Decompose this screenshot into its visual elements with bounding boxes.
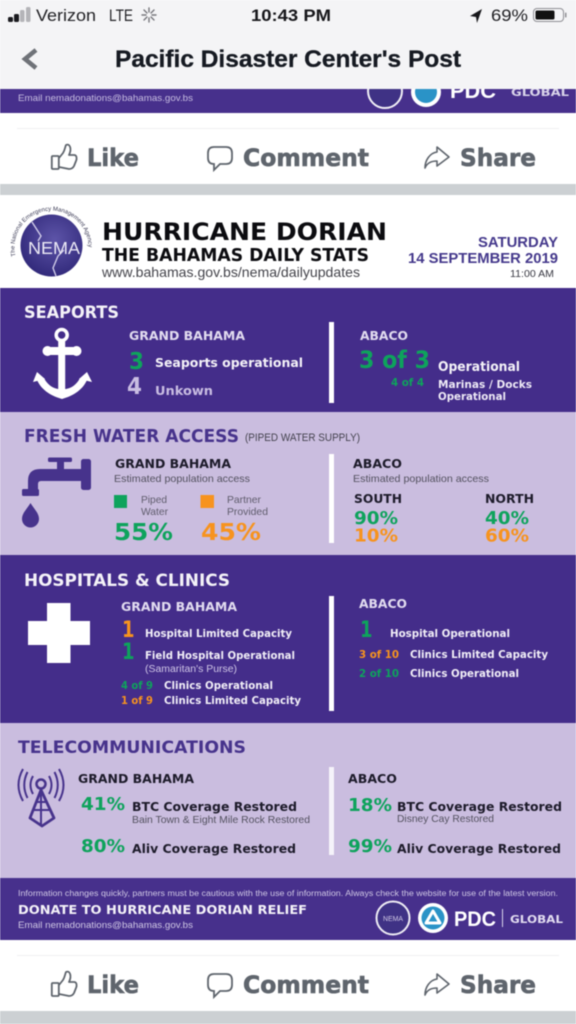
column: Abaco water: ABACO <box>353 456 402 471</box>
text: PDC wordmark: PDC <box>454 908 496 931</box>
text: Comment: Comment <box>243 144 369 172</box>
column: Abaco seaports: Operational <box>438 390 506 403</box>
legend: piped water: Piped <box>141 494 167 506</box>
column: Grand Bahama seaports: GRAND BAHAMA <box>129 328 245 343</box>
column: Abaco telecom: Disney Cay Restored <box>397 813 494 825</box>
column: Abaco hospitals: Clinics Operational <box>410 667 519 680</box>
text: network type: LTE <box>109 6 133 25</box>
column: Grand Bahama telecom: 41% <box>81 794 125 815</box>
icon: clipped PDC logo <box>411 77 441 107</box>
column: Grand Bahama hospitals: 4 of 9 <box>121 679 153 692</box>
panel: telecommunications <box>0 723 576 878</box>
column: Abaco water: NORTH <box>485 491 534 506</box>
column: Grand Bahama seaports <box>127 328 303 400</box>
column: Abaco hospitals: Clinics Limited Capacity <box>410 648 548 661</box>
divider <box>329 454 334 543</box>
column: Abaco water: 90% <box>354 508 398 529</box>
text: website: www.bahamas.gov.bs/nema/dailyupdates <box>101 264 360 280</box>
icon: NEMA logo small <box>376 902 410 934</box>
heading: seaports: SEAPORTS <box>24 303 119 323</box>
icon: NEMA logo <box>10 206 92 278</box>
icon: anchor <box>33 330 92 399</box>
column: Abaco water: SOUTH <box>354 491 402 506</box>
text: GLOBAL wordmark: GLOBAL <box>510 914 563 926</box>
text: clipped GLOBAL wordmark: GLOBAL <box>511 86 569 99</box>
panel: previous post footer strip <box>0 74 576 113</box>
icon: like thumb <box>52 972 77 996</box>
column: Abaco hospitals: 3 of 10 <box>359 648 399 661</box>
icon: clipped NEMA logo <box>368 74 402 108</box>
column: Grand Bahama telecom <box>78 771 310 857</box>
text: Share: Share <box>460 971 536 999</box>
column: Grand Bahama telecom: 80% <box>81 836 125 857</box>
column: Grand Bahama water <box>114 456 268 546</box>
divider <box>329 322 334 403</box>
text: clock: 10:43 PM <box>251 6 331 25</box>
panel: phone navigation bar <box>0 0 576 89</box>
column: Grand Bahama water: 55% <box>114 518 173 546</box>
text: battery percent: 69% <box>491 6 528 25</box>
icon: medical cross <box>28 603 90 663</box>
icon: signal bars <box>8 7 30 22</box>
heading: hospitals and clinics: HOSPITALS & CLINICS <box>24 571 230 591</box>
column: Grand Bahama seaports: 4 <box>127 374 142 400</box>
icon: location arrow <box>470 9 482 23</box>
column: Abaco telecom: Aliv Coverage Restored <box>397 841 561 856</box>
icon: share arrow <box>425 147 449 168</box>
column: Grand Bahama hospitals: 1 <box>122 618 134 643</box>
icon: NEMA logo: The National Emergency Management Agency <box>10 206 92 258</box>
column: Abaco telecom <box>348 771 562 857</box>
panel: infographic footer <box>0 878 576 940</box>
text: carrier: Verizon <box>36 6 96 25</box>
column: Grand Bahama hospitals: 1 <box>122 640 134 665</box>
column: Abaco seaports: 4 of 4 <box>391 377 424 389</box>
column: Grand Bahama seaports: Seaports operational <box>155 355 303 370</box>
column: Grand Bahama hospitals: Clinics Limited Capacity <box>164 694 301 707</box>
heading: Hurricane Dorian: HURRICANE DORIAN <box>102 218 387 246</box>
icon: NEMA logo small: NEMA <box>383 914 403 923</box>
column: Abaco seaports: ABACO <box>360 328 408 343</box>
text: Share: Share <box>460 144 536 172</box>
column: Grand Bahama water: Estimated population access <box>114 473 250 485</box>
panel: top action row <box>17 128 559 172</box>
column: Grand Bahama hospitals: GRAND BAHAMA <box>121 599 237 614</box>
column: Abaco seaports <box>359 328 532 403</box>
text: date: 14 SEPTEMBER 2019 <box>408 250 558 267</box>
column: Grand Bahama water: GRAND BAHAMA <box>115 456 231 471</box>
icon: share arrow <box>425 974 449 995</box>
column: Grand Bahama hospitals <box>121 599 301 707</box>
column: Grand Bahama telecom: BTC Coverage Restored <box>132 799 297 814</box>
column: Grand Bahama hospitals: (Samaritan's Purse) <box>145 664 237 675</box>
column: Grand Bahama telecom: Bain Town & Eight Mile Rock Restored <box>132 814 310 826</box>
legend: partner provided <box>200 494 268 518</box>
legend: partner provided: Partner <box>227 494 261 506</box>
column: Grand Bahama seaports: Unkown <box>155 383 213 398</box>
legend: partner provided: Provided <box>227 506 268 518</box>
panel: gray separator bottom <box>0 1011 576 1024</box>
panel: gray separator top <box>0 184 576 195</box>
column: Abaco hospitals: 1 <box>360 618 372 643</box>
icon: battery <box>534 8 566 22</box>
column: Grand Bahama telecom: GRAND BAHAMA <box>78 771 194 786</box>
text: weekday: SATURDAY <box>478 234 558 251</box>
legend: piped water <box>114 494 168 518</box>
legend: piped water: Water <box>141 506 168 518</box>
column: Grand Bahama seaports: 3 <box>129 349 144 375</box>
column: Grand Bahama hospitals: Field Hospital Operational <box>145 649 295 662</box>
text: Like: Like <box>87 971 139 999</box>
text: navigation title: Pacific Disaster Center's Post <box>115 46 461 73</box>
divider <box>329 767 334 855</box>
text: disclaimer: Information changes quickly, partners must be cautious with the use of information. Always check the website for use of the latest version. <box>18 889 558 898</box>
divider <box>329 596 334 711</box>
icon: PDC logo <box>418 903 448 933</box>
icon: NEMA logo: NEMA <box>28 238 80 258</box>
heading: fresh water access: FRESH WATER ACCESS <box>24 427 239 447</box>
column: Abaco hospitals: Hospital Operational <box>390 627 510 640</box>
icon: loading spinner <box>142 8 156 22</box>
panel: bottom action row <box>17 955 559 999</box>
text: clipped PDC wordmark: PDC <box>450 80 496 103</box>
column: Abaco water: Estimated population access <box>353 473 489 485</box>
column: Abaco seaports: Marinas / Docks <box>438 378 532 391</box>
heading: telecommunications: TELECOMMUNICATIONS <box>18 738 246 758</box>
column: Abaco telecom: 18% <box>348 795 392 816</box>
icon: like thumb <box>52 145 77 169</box>
icon: radio tower <box>18 769 64 826</box>
column: Abaco seaports: Operational <box>438 360 520 375</box>
column: Abaco telecom: BTC Coverage Restored <box>397 799 562 814</box>
column: Grand Bahama hospitals: 1 of 9 <box>121 694 153 707</box>
panel: hospitals and clinics <box>0 555 576 723</box>
column: Abaco hospitals <box>359 596 548 680</box>
column: Grand Bahama hospitals: Hospital Limited Capacity <box>145 627 292 640</box>
text: previous post email: Email nemadonations@bahamas.gov.bs <box>18 93 193 104</box>
column: Abaco telecom: ABACO <box>348 771 397 786</box>
column: Abaco water: 40% <box>485 508 529 529</box>
icon: comment bubble <box>208 974 232 997</box>
text: Like: Like <box>87 144 139 172</box>
column: Grand Bahama water: 45% <box>201 518 261 546</box>
column: Abaco water: 60% <box>485 526 529 546</box>
column: Abaco hospitals: ABACO <box>359 596 407 611</box>
heading: daily stats subtitle: THE BAHAMAS DAILY STATS <box>102 246 369 266</box>
column: Grand Bahama hospitals: Clinics Operational <box>164 679 273 692</box>
text: donation email: Email nemadonations@bahamas.gov.bs <box>18 920 193 931</box>
text: donate heading: DONATE TO HURRICANE DORIAN RELIEF <box>18 902 307 917</box>
column: Abaco water: 10% <box>354 526 398 546</box>
panel: infographic header <box>10 206 558 281</box>
panel: seaports <box>0 288 576 412</box>
panel: fresh water access <box>0 412 576 555</box>
text: time: 11:00 AM <box>510 268 554 280</box>
text: Comment: Comment <box>243 971 369 999</box>
column: Abaco water <box>353 456 534 546</box>
text: piped water supply note: (PIPED WATER SUPPLY) <box>245 432 360 444</box>
column: Abaco hospitals: 2 of 10 <box>359 667 399 680</box>
icon: water tap <box>22 458 91 528</box>
icon: back chevron <box>25 50 36 68</box>
column: Abaco seaports: 3 of 3 <box>359 346 430 374</box>
icon: comment bubble <box>208 147 232 170</box>
column: Abaco telecom: 99% <box>348 836 392 857</box>
column: Grand Bahama telecom: Aliv Coverage Restored <box>132 841 296 856</box>
